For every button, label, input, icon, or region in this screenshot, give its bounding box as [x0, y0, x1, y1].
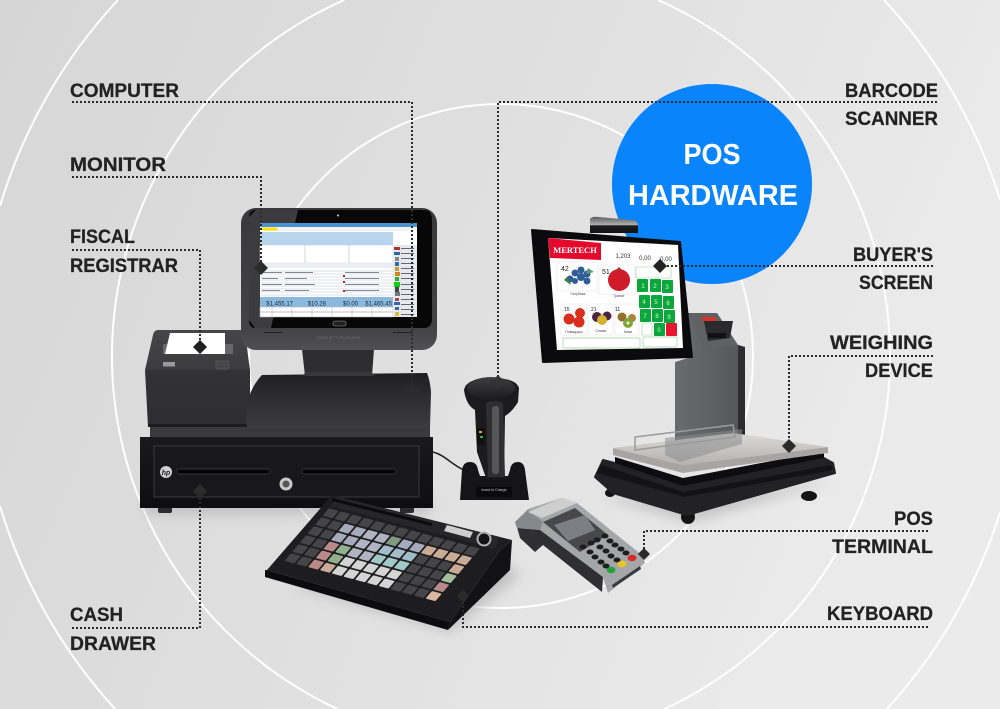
label: fiscal registrar: [70, 226, 207, 354]
product names: Голубика: [571, 292, 585, 296]
terminal face panel: [543, 508, 608, 552]
device: POS terminal: [515, 498, 645, 593]
label: cash drawer: DRAWER: [70, 633, 156, 655]
label: weighing device: WEIGHING: [830, 332, 933, 354]
device: computer base: [246, 349, 431, 428]
scale platter: [613, 425, 828, 486]
title badge: POS Hardware: POS: [684, 139, 740, 171]
device: fiscal registrar (receipt printer): [145, 330, 250, 427]
label: keyboard: [457, 590, 933, 627]
title badge: POS Hardware: [612, 84, 812, 284]
product names: Сливы: [596, 329, 607, 333]
scale base: [595, 457, 835, 524]
product counts: 15: [564, 307, 570, 313]
fruit: pomegranate: [608, 267, 630, 291]
label: buyer's screen: BUYER'S: [853, 244, 933, 266]
product counts: 21: [591, 307, 597, 313]
fruit: tomatoes: [564, 308, 585, 328]
label: cash drawer: CASH: [70, 604, 123, 626]
product counts: [561, 266, 620, 313]
charging base: Insert to Charge: [481, 488, 507, 492]
numeric keypad: 6: [666, 301, 670, 307]
terminal keypad: [580, 534, 636, 573]
label: weighing device: DEVICE: [865, 360, 933, 382]
numeric keypad: 7: [643, 314, 647, 320]
numeric keypad: 0: [657, 328, 661, 334]
monitor screen: POS software: $1,455.17: [266, 302, 294, 308]
bottom buttons: [563, 337, 677, 348]
buyer's screen display: 1,203: [615, 254, 631, 260]
label: computer: [70, 80, 419, 397]
scanner body: [464, 378, 519, 478]
label: monitor: [70, 154, 268, 275]
terminal silver top: [515, 498, 645, 593]
scanner handle: [486, 401, 505, 477]
key grid: [285, 508, 480, 601]
device: POS keyboard: [265, 495, 512, 630]
numeric keypad: 4: [642, 300, 646, 306]
label: POS terminal: [638, 508, 933, 560]
screen sidebar buttons: [393, 245, 417, 317]
product names: Киви: [624, 330, 632, 334]
buyer's screen display: 0,00: [639, 256, 651, 262]
label: keyboard: KEYBOARD: [827, 603, 933, 625]
label: weighing device: [782, 332, 933, 453]
label: POS terminal: POS: [894, 508, 933, 530]
product names: [565, 292, 632, 334]
device: cash drawer: hp: [162, 470, 171, 477]
key lock: [476, 532, 492, 546]
scale display camera: [590, 217, 638, 233]
status lights: [444, 525, 473, 538]
terminal dark side: [517, 527, 603, 592]
label: buyer's screen: [653, 244, 933, 294]
device: weighing scale: [532, 217, 835, 524]
label: monitor: MONITOR: [70, 154, 166, 176]
device: monitor: HEWLETT-PACKARD: [317, 336, 361, 340]
scale tower: [675, 313, 745, 445]
buyer's screen display: 0,00: [660, 257, 672, 263]
numeric keypad: [636, 267, 677, 336]
label: buyer's screen: SCREEN: [859, 272, 933, 294]
label: cash drawer: [70, 484, 207, 655]
label: barcode scanner: [491, 80, 938, 389]
buyer's screen frame: [532, 230, 692, 362]
numeric keypad: 3: [665, 285, 669, 291]
buyer's screen display: MERTECH: [553, 245, 597, 255]
device shadows: [145, 480, 835, 632]
product tiles: [557, 262, 639, 335]
label: fiscal registrar: REGISTRAR: [70, 255, 178, 277]
device: barcode scanner: [460, 377, 529, 500]
product names: Помидоры: [565, 330, 583, 334]
monitor screen: POS software: $10.28: [308, 302, 327, 308]
terminal display: [554, 515, 595, 541]
label: computer: COMPUTER: [70, 80, 179, 102]
numeric keypad: 9: [667, 315, 671, 321]
monitor screen: POS software: $0.00: [343, 302, 359, 308]
product counts: 11: [615, 307, 620, 313]
product counts: 51: [602, 269, 610, 276]
label: barcode scanner: BARCODE: [845, 80, 938, 102]
numeric keypad: 8: [655, 314, 659, 320]
title badge: POS Hardware: HARDWARE: [628, 180, 798, 212]
card slot: [612, 566, 641, 588]
fruit: blueberries: [564, 266, 594, 285]
magnetic card slot: [332, 498, 432, 526]
buyer's screen display: [548, 238, 683, 350]
product counts: 42: [561, 266, 569, 273]
monitor screen: POS software: $1,465.45: [365, 302, 393, 308]
numeric keypad: 1: [641, 284, 645, 290]
monitor screen: POS software: [260, 223, 417, 317]
printer cover: [528, 498, 577, 518]
product names: Гранат: [614, 294, 625, 298]
device: monitor: [241, 208, 437, 350]
label: fiscal registrar: FISCAL: [70, 226, 135, 248]
fruit: kiwi: [618, 312, 636, 328]
numeric keypad: 2: [653, 284, 657, 290]
receipt paper: [165, 333, 225, 354]
fruit: plums: [592, 312, 612, 325]
label: POS terminal: TERMINAL: [832, 536, 933, 558]
device: cash drawer: [140, 427, 464, 513]
label: barcode scanner: SCANNER: [845, 108, 938, 130]
numeric keypad: 5: [654, 300, 658, 306]
